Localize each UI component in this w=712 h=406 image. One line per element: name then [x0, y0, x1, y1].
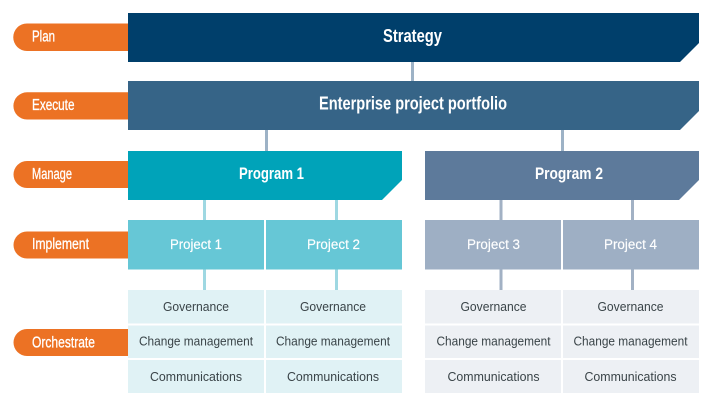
column: Project 2 activities: Governance — [300, 300, 366, 314]
column: Project 4 activities: Change management — [574, 334, 688, 348]
banner: Program 2: Program 2 — [535, 164, 603, 183]
banner: Strategy — [128, 13, 699, 62]
column: Project 4 activities: Communications — [584, 370, 676, 384]
label: Manage: Manage — [32, 166, 72, 183]
column: Project 1 activities: Governance — [163, 300, 229, 314]
label: Implement — [14, 232, 128, 258]
column: Project 2 activities: Change management — [276, 334, 390, 348]
banner: Program 1: Program 1 — [239, 164, 304, 183]
banner: Program 2 — [425, 151, 699, 200]
column: Project 3 activities: Governance — [460, 300, 527, 314]
banner: Enterprise project portfolio: Enterprise project portfolio — [319, 94, 507, 114]
label: Implement: Implement — [32, 236, 90, 253]
box: Project 4: Project 4 — [604, 237, 657, 252]
banner: Enterprise project portfolio — [128, 81, 699, 130]
label: Plan — [13, 24, 128, 51]
banner: Program 1 — [128, 151, 402, 200]
label: Plan: Plan — [32, 28, 55, 46]
box: Project 2: Project 2 — [307, 237, 360, 252]
column: Project 1 activities — [128, 290, 264, 393]
label: Orchestrate: Orchestrate — [32, 334, 95, 352]
box: Project 1: Project 1 — [170, 237, 222, 252]
column: Project 4 activities: Governance — [598, 300, 664, 314]
box: Project 1 — [128, 220, 264, 270]
box: Project 4 — [563, 220, 699, 270]
column: Project 3 activities — [425, 290, 561, 393]
label: Orchestrate — [14, 329, 128, 356]
column: Project 3 activities: Communications — [448, 370, 540, 384]
column: Project 1 activities: Change management — [139, 334, 253, 348]
box: Project 2 — [266, 220, 402, 270]
label: Execute — [13, 92, 128, 120]
banner: Strategy: Strategy — [383, 26, 442, 46]
column: Project 2 activities: Communications — [287, 370, 379, 384]
column: Project 4 activities — [563, 290, 699, 393]
column: Project 3 activities: Change management — [436, 334, 551, 348]
label: Manage — [14, 161, 128, 188]
column: Project 1 activities: Communications — [150, 370, 242, 384]
column: Project 2 activities — [266, 290, 402, 393]
box: Project 3: Project 3 — [467, 237, 520, 252]
box: Project 3 — [425, 220, 561, 270]
label: Execute: Execute — [32, 97, 74, 114]
